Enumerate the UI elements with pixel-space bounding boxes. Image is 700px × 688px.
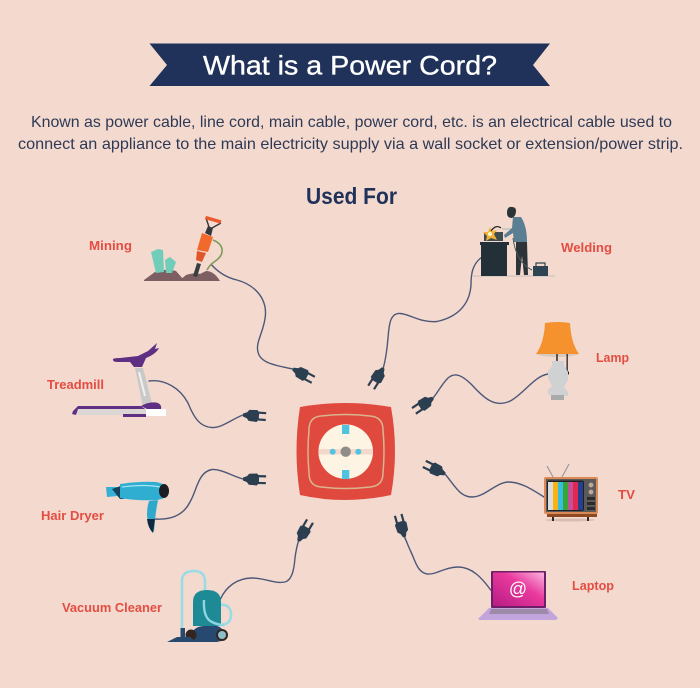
icon: laptop: @ (509, 579, 527, 599)
icon: vacuum cleaner (167, 571, 231, 642)
icon: hair dryer (106, 482, 169, 533)
cable: mining (212, 265, 316, 385)
icon: welding (472, 207, 555, 277)
title banner: What is a Power Cord? (203, 50, 497, 80)
description text: Known as power cable, line cord, main cable, power cord, etc. is an electrical cable used to (31, 114, 672, 131)
icon: laptop (478, 571, 558, 620)
label: vacuum cleaner: Vacuum Cleaner (62, 600, 162, 615)
icon: wall socket (296, 403, 395, 500)
cable: tv (422, 459, 544, 497)
icon: treadmill (72, 343, 166, 417)
description text (18, 114, 683, 153)
cable: hair dryer (155, 469, 266, 519)
label: lamp: Lamp (596, 350, 629, 365)
cable: lamp (411, 374, 548, 416)
title banner (150, 44, 550, 86)
heading: used for: Used For (306, 183, 397, 209)
label: treadmill: Treadmill (47, 377, 104, 392)
label: tv: TV (618, 487, 635, 502)
label: hair dryer: Hair Dryer (41, 508, 104, 523)
icon: mining (144, 218, 222, 281)
label: welding: Welding (561, 240, 612, 255)
icon: tv (544, 464, 598, 522)
cable: treadmill (149, 381, 266, 428)
cable: laptop (392, 513, 491, 590)
label: laptop: Laptop (572, 578, 614, 593)
icon: lamp (536, 322, 579, 400)
description text: connect an appliance to the main electricity supply via a wall socket or extension/power strip. (18, 136, 683, 153)
cable: welding (366, 258, 481, 391)
label: mining: Mining (89, 238, 132, 253)
cable: vacuum cleaner (220, 518, 315, 600)
